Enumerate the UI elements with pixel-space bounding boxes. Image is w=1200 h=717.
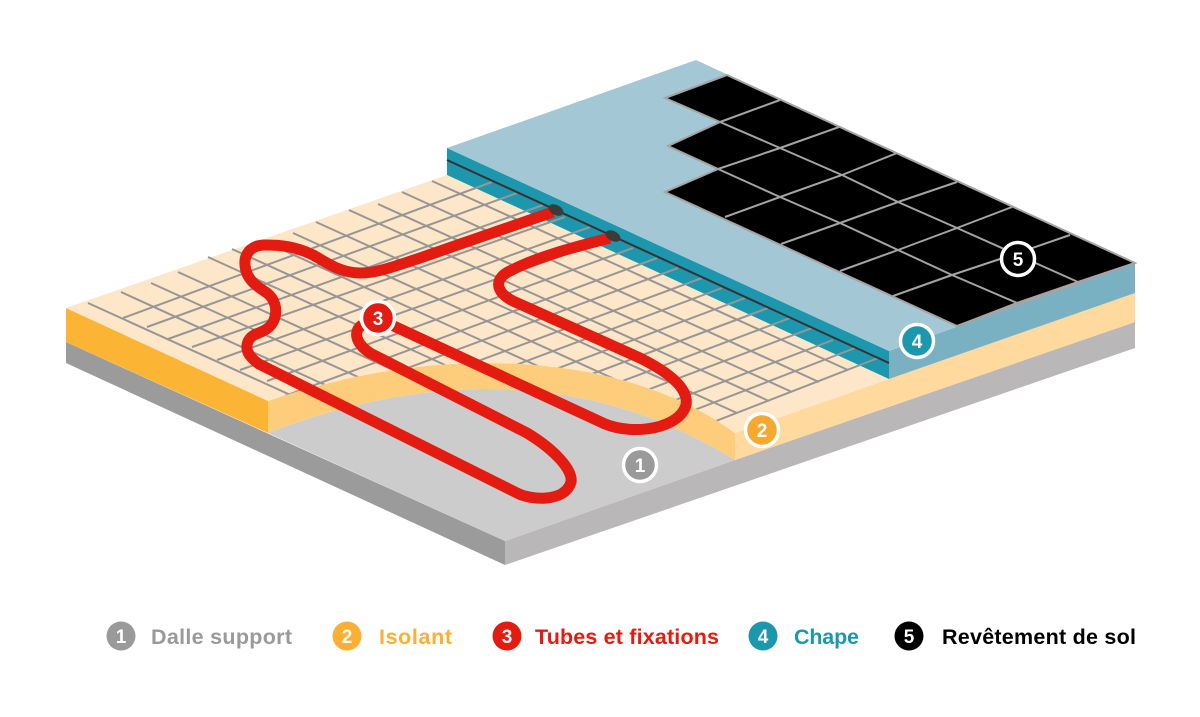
legend item 5: [894, 622, 1136, 650]
legend item 3: Tubes et fixations: [535, 625, 719, 649]
badge 4: 4: [912, 332, 923, 353]
layer: support slab: [66, 322, 1135, 565]
heating tube: [245, 212, 686, 498]
badge 2: 2: [757, 421, 767, 442]
legend item 1: Dalle support: [151, 625, 292, 649]
badge 5: 5: [1013, 250, 1024, 271]
badge 5: [1002, 242, 1034, 276]
badge 4: [900, 324, 934, 358]
wire mesh: [88, 180, 878, 422]
badge 2: [746, 414, 778, 446]
legend item 4: [748, 622, 859, 650]
legend item 2: Isolant: [379, 625, 452, 649]
legend item 1: [106, 622, 292, 650]
layer: floor covering tiles: [665, 75, 1135, 326]
layer: screed: [447, 60, 1135, 379]
infographic: floor heating layers: [66, 60, 1138, 650]
legend item 2: 2: [342, 627, 352, 648]
layer: insulation: [66, 175, 1135, 460]
legend item 2: [332, 622, 452, 650]
legend item 5: 5: [904, 627, 915, 648]
legend: [106, 622, 1136, 650]
tube fixings: [547, 202, 622, 244]
dark line along screed edge: [447, 160, 889, 363]
legend item 4: Chape: [794, 625, 859, 649]
badge 3: [362, 302, 394, 334]
isometric floor diagram: [66, 60, 1135, 565]
badge 1: 1: [635, 456, 646, 477]
legend item 3: [492, 622, 719, 650]
legend item 3: 3: [502, 627, 512, 648]
legend item 1: 1: [116, 627, 127, 648]
legend item 5: Revêtement de sol: [942, 625, 1136, 649]
legend item 4: 4: [758, 627, 769, 648]
badge 1: [624, 448, 656, 482]
badge 3: 3: [373, 309, 383, 330]
